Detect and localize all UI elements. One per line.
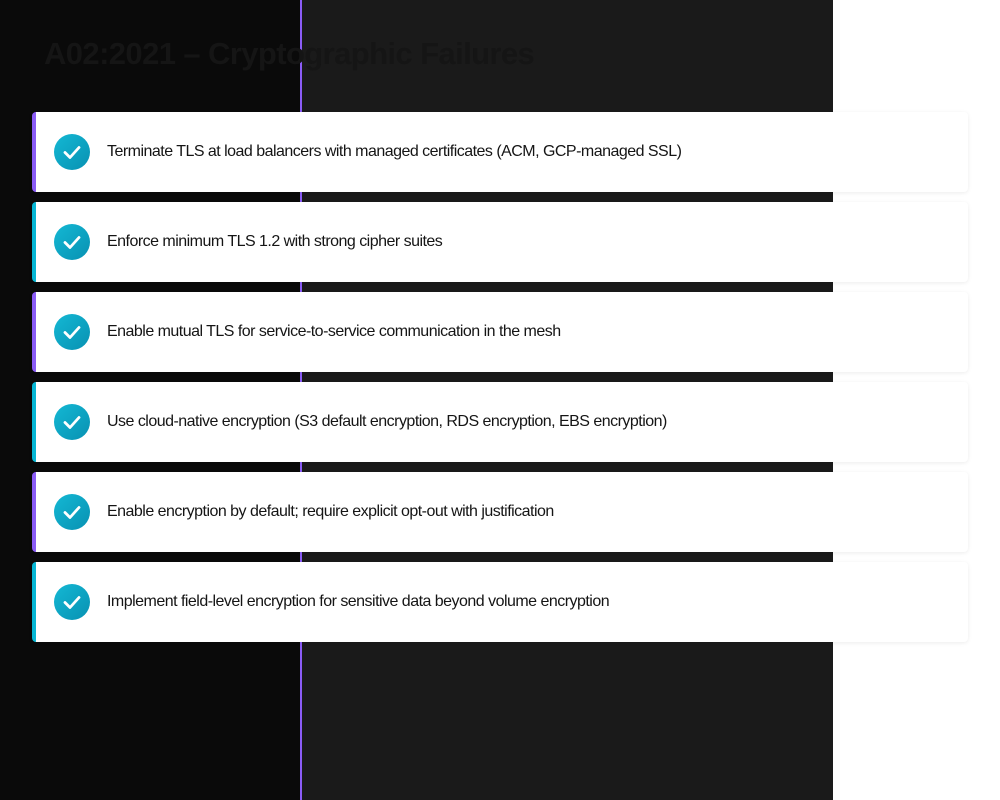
icon: check xyxy=(54,404,90,440)
card 3: Enable mutual TLS for service-to-service communication in the mesh xyxy=(107,323,561,340)
card 4 xyxy=(32,382,968,462)
card 2 xyxy=(32,202,968,282)
card 4: Use cloud-native encryption (S3 default encryption, RDS encryption, EBS encryption) xyxy=(107,413,667,430)
card 5: Enable encryption by default; require explicit opt-out with justification xyxy=(107,503,554,520)
card 2: Enforce minimum TLS 1.2 with strong cipher suites xyxy=(107,233,442,250)
card 6: Implement field-level encryption for sensitive data beyond volume encryption xyxy=(107,593,609,610)
card 1 xyxy=(32,112,968,192)
card 6 xyxy=(32,562,968,642)
card 3 xyxy=(32,292,968,372)
icon: check xyxy=(54,494,90,530)
icon: check xyxy=(54,224,90,260)
icon: check xyxy=(54,314,90,350)
icon: check xyxy=(54,134,90,170)
card 1: Terminate TLS at load balancers with managed certificates (ACM, GCP-managed SSL) xyxy=(107,143,681,160)
card 5 xyxy=(32,472,968,552)
icon: check xyxy=(54,584,90,620)
title: A02:2021 – Cryptographic Failures xyxy=(44,36,534,71)
